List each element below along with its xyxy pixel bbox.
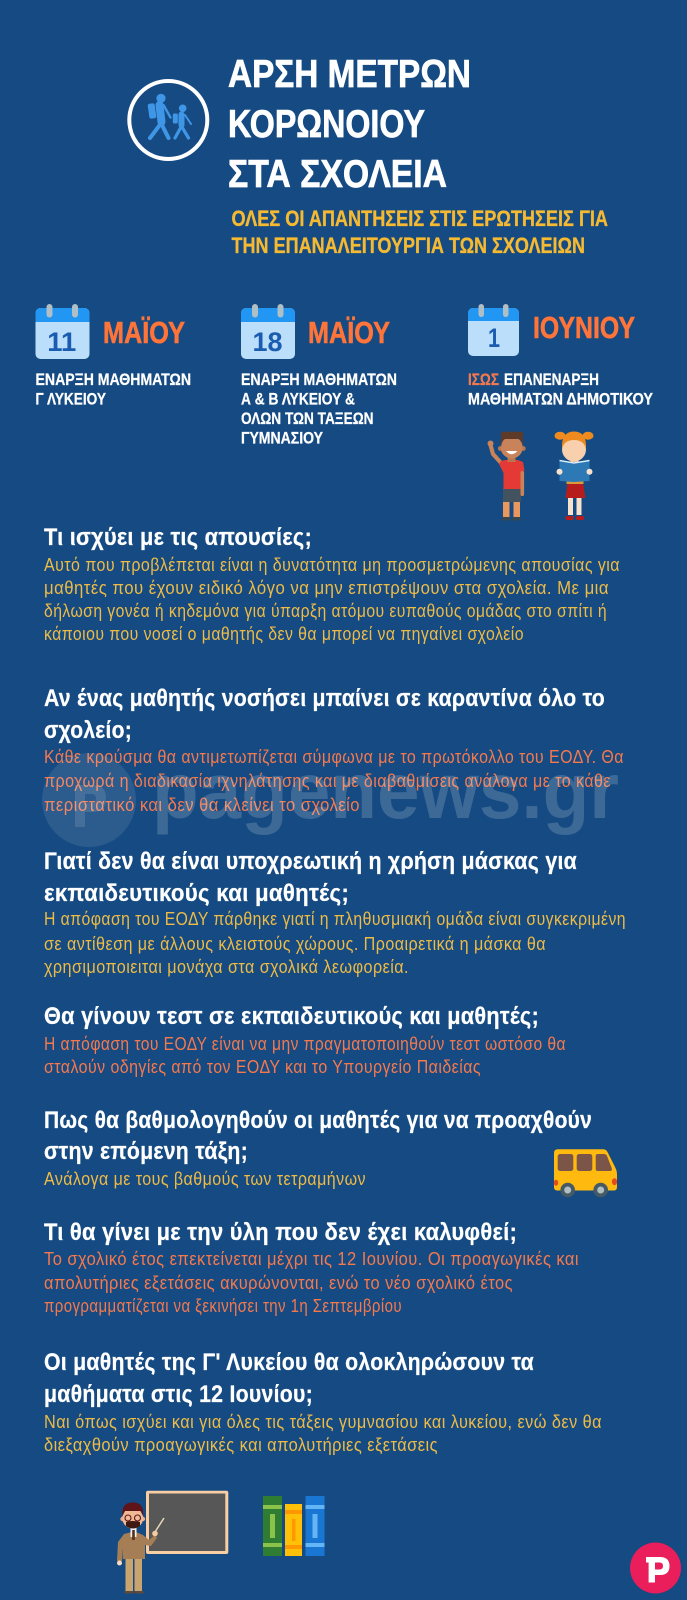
subtitle	[232, 206, 608, 258]
answer: Αυτό που προβλέπεται είναι η δυνατότητα μη προσμετρώμενης απουσίας για	[44, 555, 620, 575]
description: ΕΝΑΡΞΗ ΜΑΘΗΜΑΤΩΝ	[241, 371, 397, 389]
answer	[44, 1034, 566, 1077]
question: absences	[44, 524, 620, 644]
question: masks: εκπαιδευτικούς και μαθητές;	[44, 880, 349, 907]
answer: απολυτήριες εξετάσεις ακυρώνονται, ενώ το νέο σχολικό έτος	[44, 1273, 513, 1293]
question: quarantine	[44, 685, 624, 815]
answer: δήλωση γονέα ή κηδεμόνα για ύπαρξη ατόμου ευπαθούς ομάδας στο σπίτι ή	[44, 601, 607, 621]
panel: 1 June	[468, 304, 653, 408]
heading: Γιατί δεν θα είναι υποχρεωτική η χρήση μάσκας για	[44, 848, 577, 875]
answer: διεξαχθούν προαγωγικές και απολυτήριες εξετάσεις	[44, 1435, 438, 1455]
watermark: pagenews.gr	[42, 746, 619, 847]
question: syllabus	[44, 1219, 579, 1316]
description: ΙΣΩΣ	[468, 371, 499, 389]
description: ΕΠΑΝΕΝΑΡΞΗ	[504, 371, 599, 389]
question: final year	[44, 1349, 602, 1455]
answer	[44, 1412, 602, 1455]
illustration: girl reading	[554, 432, 594, 520]
logo: pagenews	[630, 1542, 681, 1594]
heading: Τι θα γίνει με την ύλη που δεν έχει καλυφθεί;	[44, 1219, 517, 1246]
description: ΟΛΩΝ ΤΩΝ ΤΑΞΕΩΝ	[241, 410, 374, 428]
heading: Πως θα βαθμολογηθούν οι μαθητές για να προαχθούν	[44, 1107, 592, 1134]
description	[36, 371, 191, 408]
subtitle: ΤΗΝ ΕΠΑΝΑΛΕΙΤΟΥΡΓΙΑ ΤΩΝ ΣΧΟΛΕΙΩΝ	[232, 233, 585, 258]
description: Α & Β ΛΥΚΕΙΟΥ &	[241, 390, 355, 408]
answer: Ναι όπως ισχύει και για όλες τις τάξεις γυμνασίου και λυκείου, ενώ δεν θα	[44, 1412, 602, 1432]
title: ΣΤΑ ΣΧΟΛΕΙΑ	[228, 153, 447, 196]
answer: σε αντίθεση με άλλους κλειστούς χώρους. Προαιρετικά η μάσκα θα	[44, 934, 546, 954]
illustration: teacher at blackboard	[117, 1491, 228, 1594]
heading: Θα γίνουν τεστ σε εκπαιδευτικούς και μαθητές;	[44, 1003, 539, 1030]
title	[228, 53, 471, 196]
icon: school bus	[554, 1149, 617, 1197]
answer: χρησιμοποιειται μονάχα στα σχολικά λεωφορεία.	[44, 957, 409, 977]
answer: περιστατικό και δεν θα κλείνει το σχολείο	[44, 795, 360, 815]
heading: Οι μαθητές της Γ' Λυκείου θα ολοκληρώσουν τα	[44, 1349, 534, 1376]
icon: calendar 11	[36, 304, 90, 359]
icon: walking schoolchildren	[129, 81, 207, 159]
description: ΕΝΑΡΞΗ ΜΑΘΗΜΑΤΩΝ	[36, 371, 191, 389]
question: quarantine: σχολείο;	[44, 717, 132, 744]
question: final year: μαθήματα στις 12 Ιουνίου;	[44, 1381, 313, 1408]
subtitle: ΟΛΕΣ ΟΙ ΑΠΑΝΤΗΣΕΙΣ ΣΤΙΣ ΕΡΩΤΗΣΕΙΣ ΓΙΑ	[232, 206, 608, 231]
answer: Κάθε κρούσμα θα αντιμετωπίζεται σύμφωνα με το πρωτόκολλο του ΕΟΔΥ. Θα	[44, 747, 624, 767]
date label: ΜΑΪΟΥ	[308, 315, 390, 350]
illustration: books	[263, 1496, 324, 1556]
heading: Αν ένας μαθητής νοσήσει μπαίνει σε καραντίνα όλο το	[44, 685, 605, 712]
illustration: boy waving	[488, 432, 526, 520]
date label: ΙΟΥΝΙΟΥ	[533, 310, 635, 345]
answer: προγραμματίζεται να ξεκινήσει την 1η Σεπτεμβρίου	[44, 1296, 402, 1316]
date label: ΜΑΪΟΥ	[103, 315, 185, 350]
description: ΓΥΜΝΑΣΙΟΥ	[241, 430, 323, 448]
panel: 18 May	[241, 304, 397, 448]
description: ΜΑΘΗΜΑΤΩΝ ΔΗΜΟΤΙΚΟΥ	[468, 390, 653, 408]
answer	[44, 909, 626, 977]
icon: calendar 11: 11	[47, 327, 76, 357]
question: tests	[44, 1003, 566, 1077]
question: grading	[44, 1107, 592, 1189]
answer: προχωρά η διαδικασία ιχνηλάτησης και με διαβαθμίσεις ανάλογα με το κάθε	[44, 771, 611, 791]
description	[468, 371, 653, 408]
answer: Η απόφαση του ΕΟΔΥ είναι να μην πραγματοποιηθούν τεστ ωστόσο θα	[44, 1034, 566, 1054]
answer: Ανάλογα με τους βαθμούς των τετραμήνων	[44, 1169, 366, 1189]
panel: 11 May	[36, 304, 191, 408]
answer: κάποιου που νοσεί ο μαθητής δεν θα μπορεί να πηγαίνει σχολείο	[44, 624, 524, 644]
icon: calendar 18	[241, 304, 295, 359]
answer: Το σχολικό έτος επεκτείνεται μέχρι τις 12 Ιουνίου. Οι προαγωγικές και	[44, 1249, 579, 1269]
icon: calendar 18: 18	[252, 327, 282, 357]
icon: calendar 1: 1	[488, 323, 500, 353]
heading: Τι ισχύει με τις απουσίες;	[44, 524, 312, 551]
title: ΑΡΣΗ ΜΕΤΡΩΝ	[228, 53, 471, 96]
answer: μαθητές που έχουν ειδικό λόγο να μην επιστρέψουν στα σχολεία. Με μια	[44, 578, 609, 598]
description	[241, 371, 397, 448]
answer: σταλούν οδηγίες από τον ΕΟΔΥ και το Υπουργείο Παιδείας	[44, 1057, 481, 1077]
watermark: pagenews.gr: pagenews.gr	[152, 746, 619, 835]
question: grading: στην επόμενη τάξη;	[44, 1138, 248, 1165]
title: ΚΟΡΩΝΟΙΟΥ	[228, 103, 425, 146]
answer	[44, 747, 624, 815]
answer	[44, 555, 620, 644]
description: Γ ΛΥΚΕΙΟΥ	[36, 390, 106, 408]
answer	[44, 1249, 579, 1316]
icon: calendar 1	[468, 304, 519, 356]
question: masks	[44, 848, 626, 977]
